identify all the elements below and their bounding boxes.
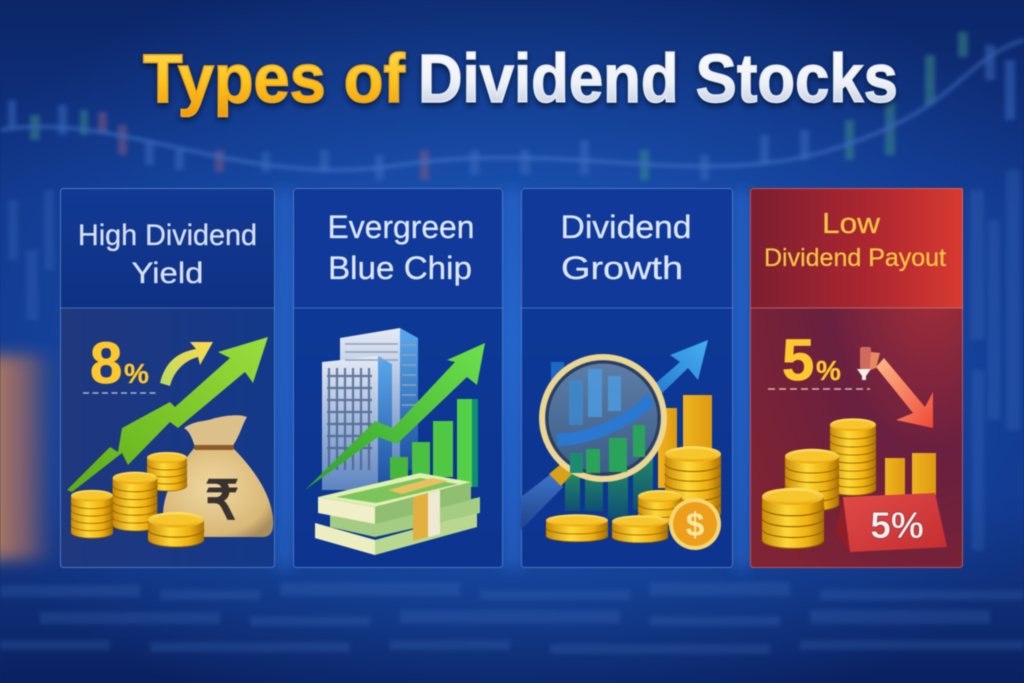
panel: evergreen blue chip [293,188,503,568]
title: Types of [143,40,406,117]
stat: 8 percent [83,331,156,396]
icon: green zigzag growth arrow [67,337,268,492]
header: dividend growth: Growth [561,250,683,286]
header: dividend growth [521,188,733,308]
header: high dividend yield: Yield [132,257,204,290]
callout: 5 percent tent card [835,493,947,552]
icon: cash stacks [315,473,480,555]
icon: green bars [390,399,478,487]
icon: coin stacks [71,452,204,547]
stat: 8 percent: 8 [90,331,122,396]
icon: green up arrow [305,343,485,490]
icon: office buildings [322,328,418,490]
stat: 5 percent: % [816,355,841,386]
panel: high dividend yield [60,188,275,568]
icon: money bag with rupee [163,415,273,537]
panel: low dividend payout [750,188,963,568]
icon: magnifying glass [521,357,664,530]
bar chart: green and gold bars [551,362,712,518]
header: low dividend payout: Low [822,208,881,240]
title [143,40,898,117]
header: evergreen blue chip [293,188,503,308]
icon: red falling arrow [876,358,933,428]
callout: 5 percent tent card: 5% [870,505,924,546]
header: low dividend payout: Dividend Payout [764,244,946,272]
header: evergreen blue chip: Evergreen [328,209,474,245]
header: high dividend yield: High Dividend [78,219,257,252]
icon: marker pen [857,347,880,380]
header: high dividend yield [60,188,275,308]
icon: yellow up arrow [160,342,213,386]
icon: blue rising arrow [642,340,708,405]
icon: dollar coin: $ [686,506,704,543]
stat: 5 percent: 5 [782,328,814,393]
icon: coin stacks [762,418,876,548]
icon: coin stacks [546,446,721,543]
stat: 5 percent [768,328,870,393]
header: evergreen blue chip: Blue Chip [328,250,472,286]
stat: 8 percent: % [124,358,149,389]
panel: dividend growth [521,188,733,568]
header: dividend growth: Dividend [560,209,692,245]
icon: money bag with rupee: ₹ [205,471,239,531]
icon: gold bars [885,453,936,496]
header: low dividend payout [750,188,963,308]
title: Dividend Stocks [418,40,898,117]
icon: dollar coin [669,498,721,550]
